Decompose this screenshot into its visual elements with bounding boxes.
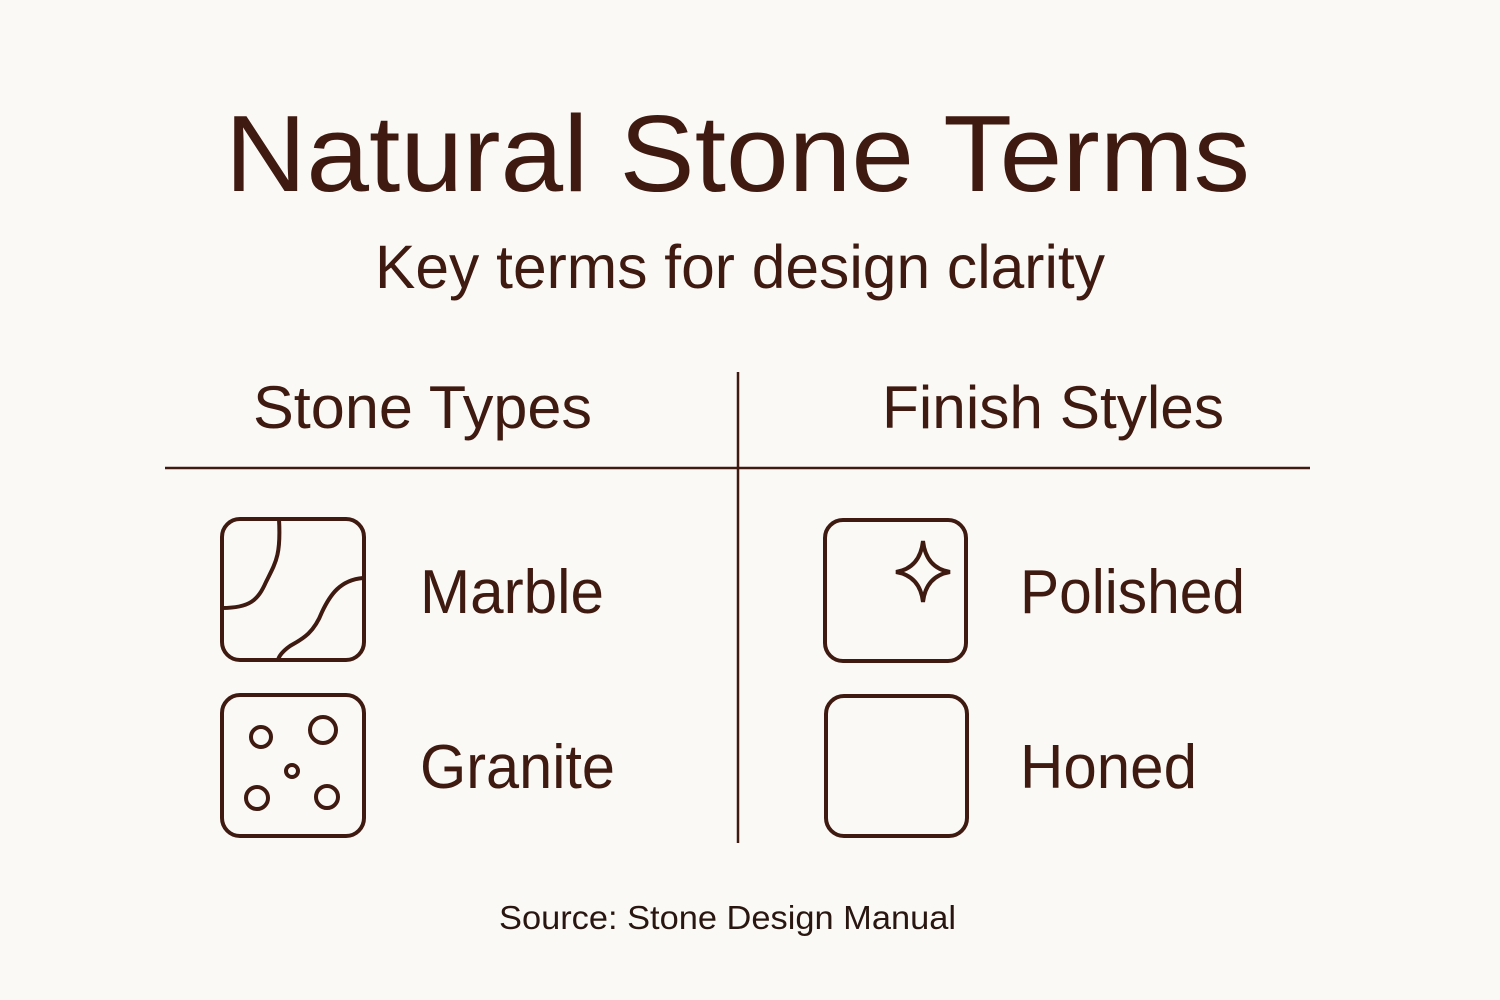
label: Granite: Granite [420,733,615,802]
icon: marble [222,519,364,660]
heading: Finish Styles: Finish Styles [882,374,1224,441]
heading: Stone Types: Stone Types [253,374,592,441]
title: Natural Stone Terms [225,93,1250,215]
icon: granite [222,695,364,836]
icon: polished [825,520,966,661]
label: Marble: Marble [420,558,604,627]
label: Polished: Polished [1020,558,1245,627]
label: Honed: Honed [1020,733,1197,802]
icon: honed [826,696,967,836]
source note: Source: Stone Design Manual [499,899,956,936]
subtitle: Key terms for design clarity [375,233,1105,301]
